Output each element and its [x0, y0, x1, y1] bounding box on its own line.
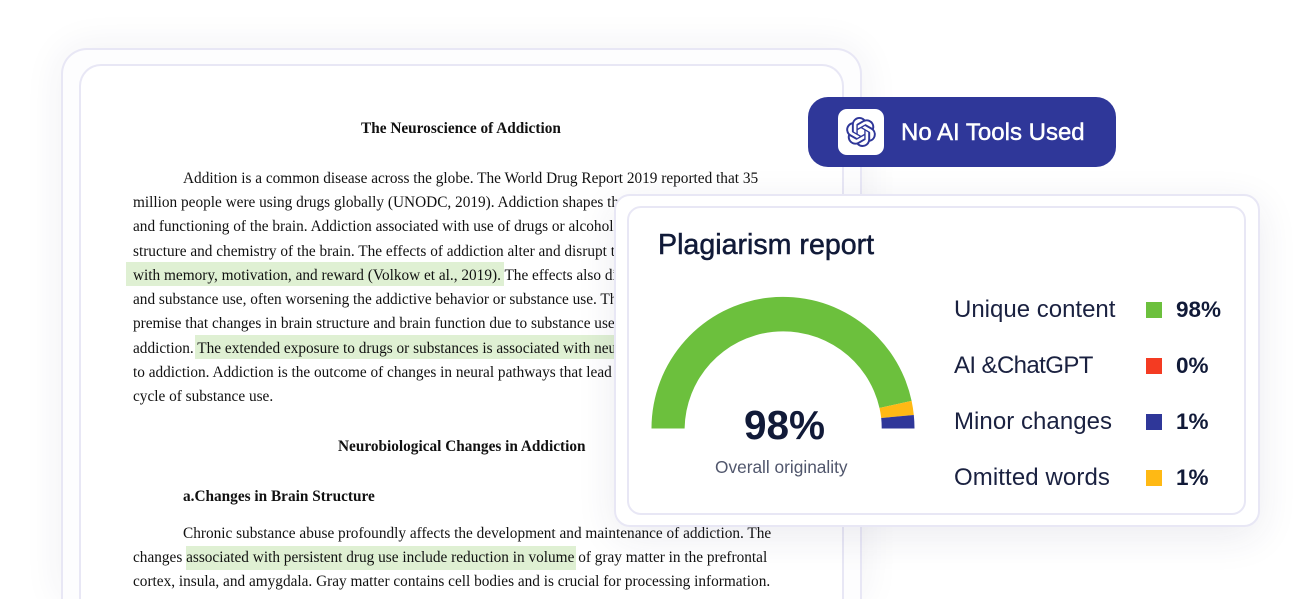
gauge value: 98%	[744, 402, 825, 448]
legend: minor changes	[954, 408, 1209, 435]
legend: unique content	[954, 296, 1221, 323]
icon: ChatGPT knot	[838, 109, 884, 155]
sub heading: a.Changes in Brain Structure	[183, 488, 375, 505]
badge label: No AI Tools Used	[901, 119, 1085, 146]
essay paragraph two: cortex, insula, and amygdala. Gray matter contains cell bodies and is crucial for processing information.	[133, 573, 770, 590]
gauge caption: Overall originality	[715, 457, 848, 477]
badge: no AI tools used	[808, 97, 1116, 167]
legend: AI and ChatGPT: 0%	[1176, 353, 1209, 378]
essay paragraph one: Addition is a common disease across the globe. The World Drug Report 2019 reported that 35	[183, 170, 758, 187]
essay paragraph one: with memory, motivation, and reward (Volkow et al., 2019). The effects also disrupt	[133, 267, 647, 284]
highlight: persistent drug use phrase	[186, 546, 576, 570]
highlight: memory sentence	[126, 262, 504, 286]
essay paragraph one: addiction. The extended exposure to drugs or substances is associated with neural	[133, 340, 632, 357]
essay paragraph two: changes associated with persistent drug use include reduction in volume of gray matter in the prefrontal	[133, 549, 767, 566]
essay paragraph one: and substance use, often worsening the addictive behavior or substance use. The	[133, 291, 624, 308]
panel: essay document outer frame	[61, 48, 862, 599]
legend: minor changes: 1%	[1176, 409, 1209, 434]
legend: omitted words	[954, 464, 1209, 491]
highlight: extended exposure sentence	[195, 335, 635, 359]
essay paragraph one: cycle of substance use.	[133, 388, 273, 405]
report title: Plagiarism report	[658, 229, 874, 261]
legend: unique content: 98%	[1176, 297, 1221, 322]
panel: report inner frame	[627, 206, 1246, 515]
panel: plagiarism report card	[614, 194, 1260, 527]
document heading: The Neuroscience of Addiction	[361, 120, 561, 137]
legend: unique content: Unique content	[954, 296, 1115, 323]
essay paragraph one: and functioning of the brain. Addiction associated with use of drugs or alcohol changes	[133, 218, 667, 235]
legend: omitted words: 1%	[1176, 465, 1209, 490]
essay paragraph two: Chronic substance abuse profoundly affects the development and maintenance of addiction. The	[183, 525, 771, 542]
essay paragraph one: to addiction. Addiction is the outcome of changes in neural pathways that lead to a	[133, 364, 638, 381]
panel: essay document page	[79, 64, 844, 599]
legend: omitted words: Omitted words	[954, 464, 1110, 491]
essay paragraph one: structure and chemistry of the brain. The effects of addiction alter and disrupt the areas	[133, 243, 665, 260]
essay paragraph one: premise that changes in brain structure and brain function due to substance use lead	[133, 315, 644, 332]
essay paragraph one: million people were using drugs globally (UNODC, 2019). Addiction shapes the structure	[133, 194, 683, 211]
section heading: Neurobiological Changes in Addiction	[338, 438, 585, 455]
legend: AI and ChatGPT: AI &ChatGPT	[954, 352, 1093, 379]
legend: minor changes: Minor changes	[954, 408, 1112, 435]
essay paragraph two	[133, 525, 771, 590]
legend: AI and ChatGPT	[954, 352, 1209, 379]
chart: originality gauge	[652, 296, 914, 428]
essay paragraph one	[133, 170, 758, 405]
